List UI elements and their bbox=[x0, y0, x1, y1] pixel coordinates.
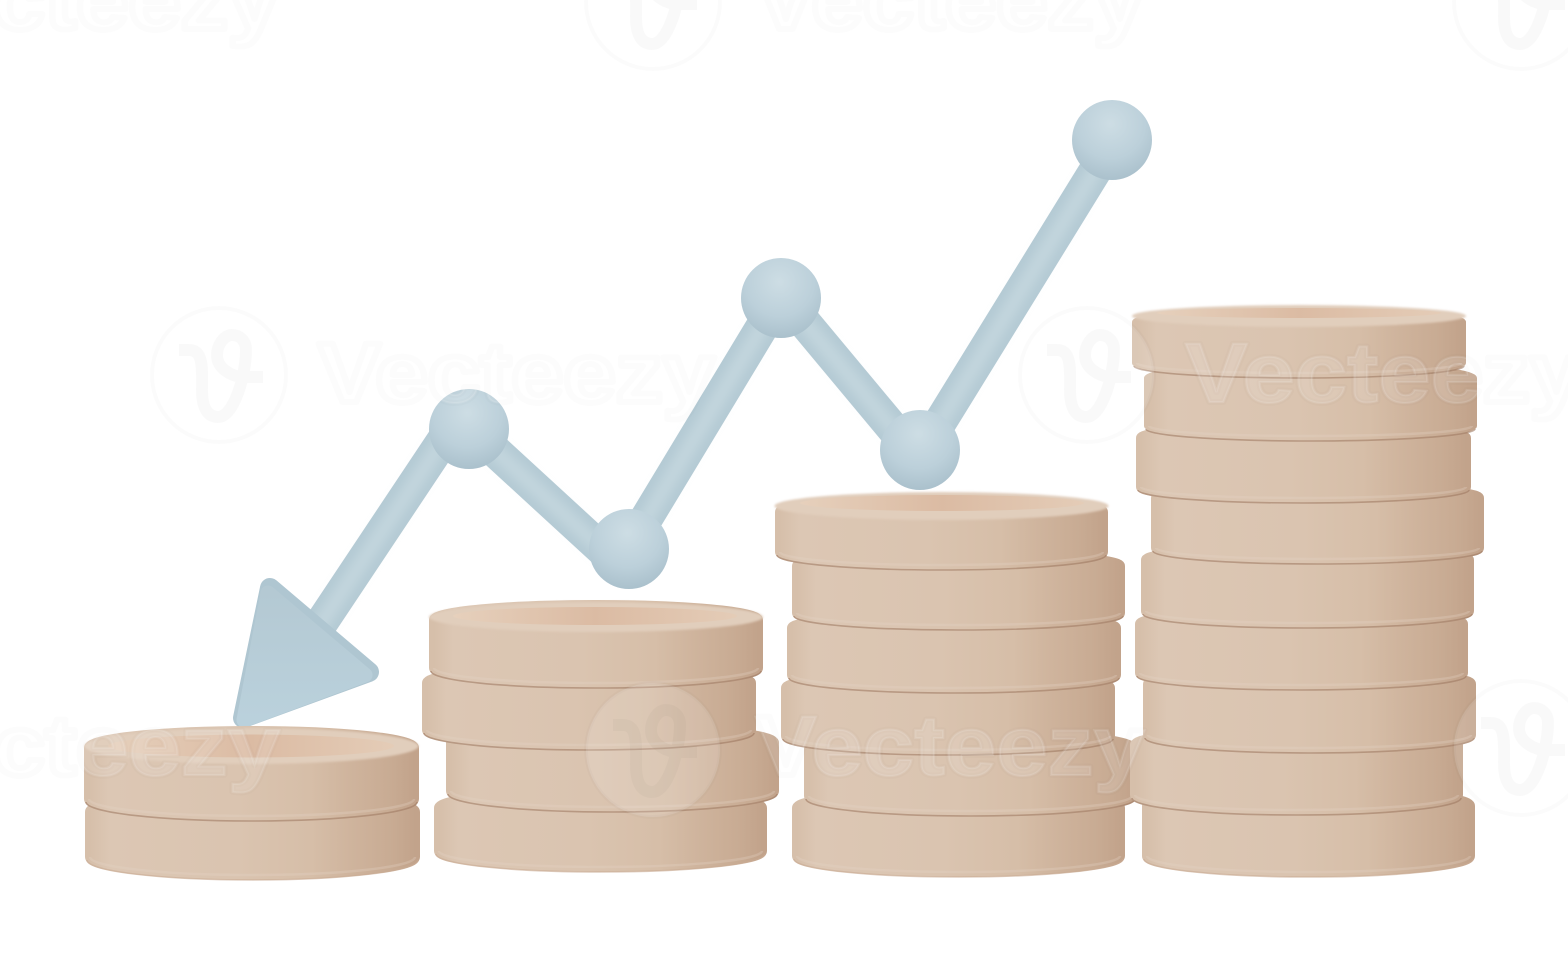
arrow shaft bbox=[310, 150, 1108, 640]
watermark: Vecteezy text: Vecteezy bbox=[1185, 326, 1568, 420]
coin stack 2 bbox=[424, 602, 777, 872]
top coin face bbox=[774, 492, 1108, 520]
top coin face bbox=[429, 602, 763, 632]
coin stack 4 bbox=[1132, 305, 1482, 877]
watermark: Vecteezy text: Vecteezy bbox=[1185, 326, 1568, 420]
watermark: Vecteezy text: Vecteezy bbox=[318, 326, 715, 420]
top coin bbox=[84, 728, 418, 821]
top coin face bbox=[1132, 305, 1466, 327]
coin stack 1 bbox=[84, 728, 418, 880]
watermark: Vecteezy text: Vecteezy bbox=[755, 699, 1145, 793]
coin stack 3 bbox=[774, 492, 1135, 877]
arrow head bbox=[243, 588, 369, 720]
arrow nodes bbox=[429, 100, 1152, 589]
watermark: Vecteezy text: Vecteezy bbox=[755, 699, 1145, 793]
watermark: logo marks bbox=[152, 0, 1568, 817]
watermark: Vecteezy text: Vecteezy bbox=[318, 326, 715, 420]
zigzag arrow bbox=[243, 100, 1152, 720]
